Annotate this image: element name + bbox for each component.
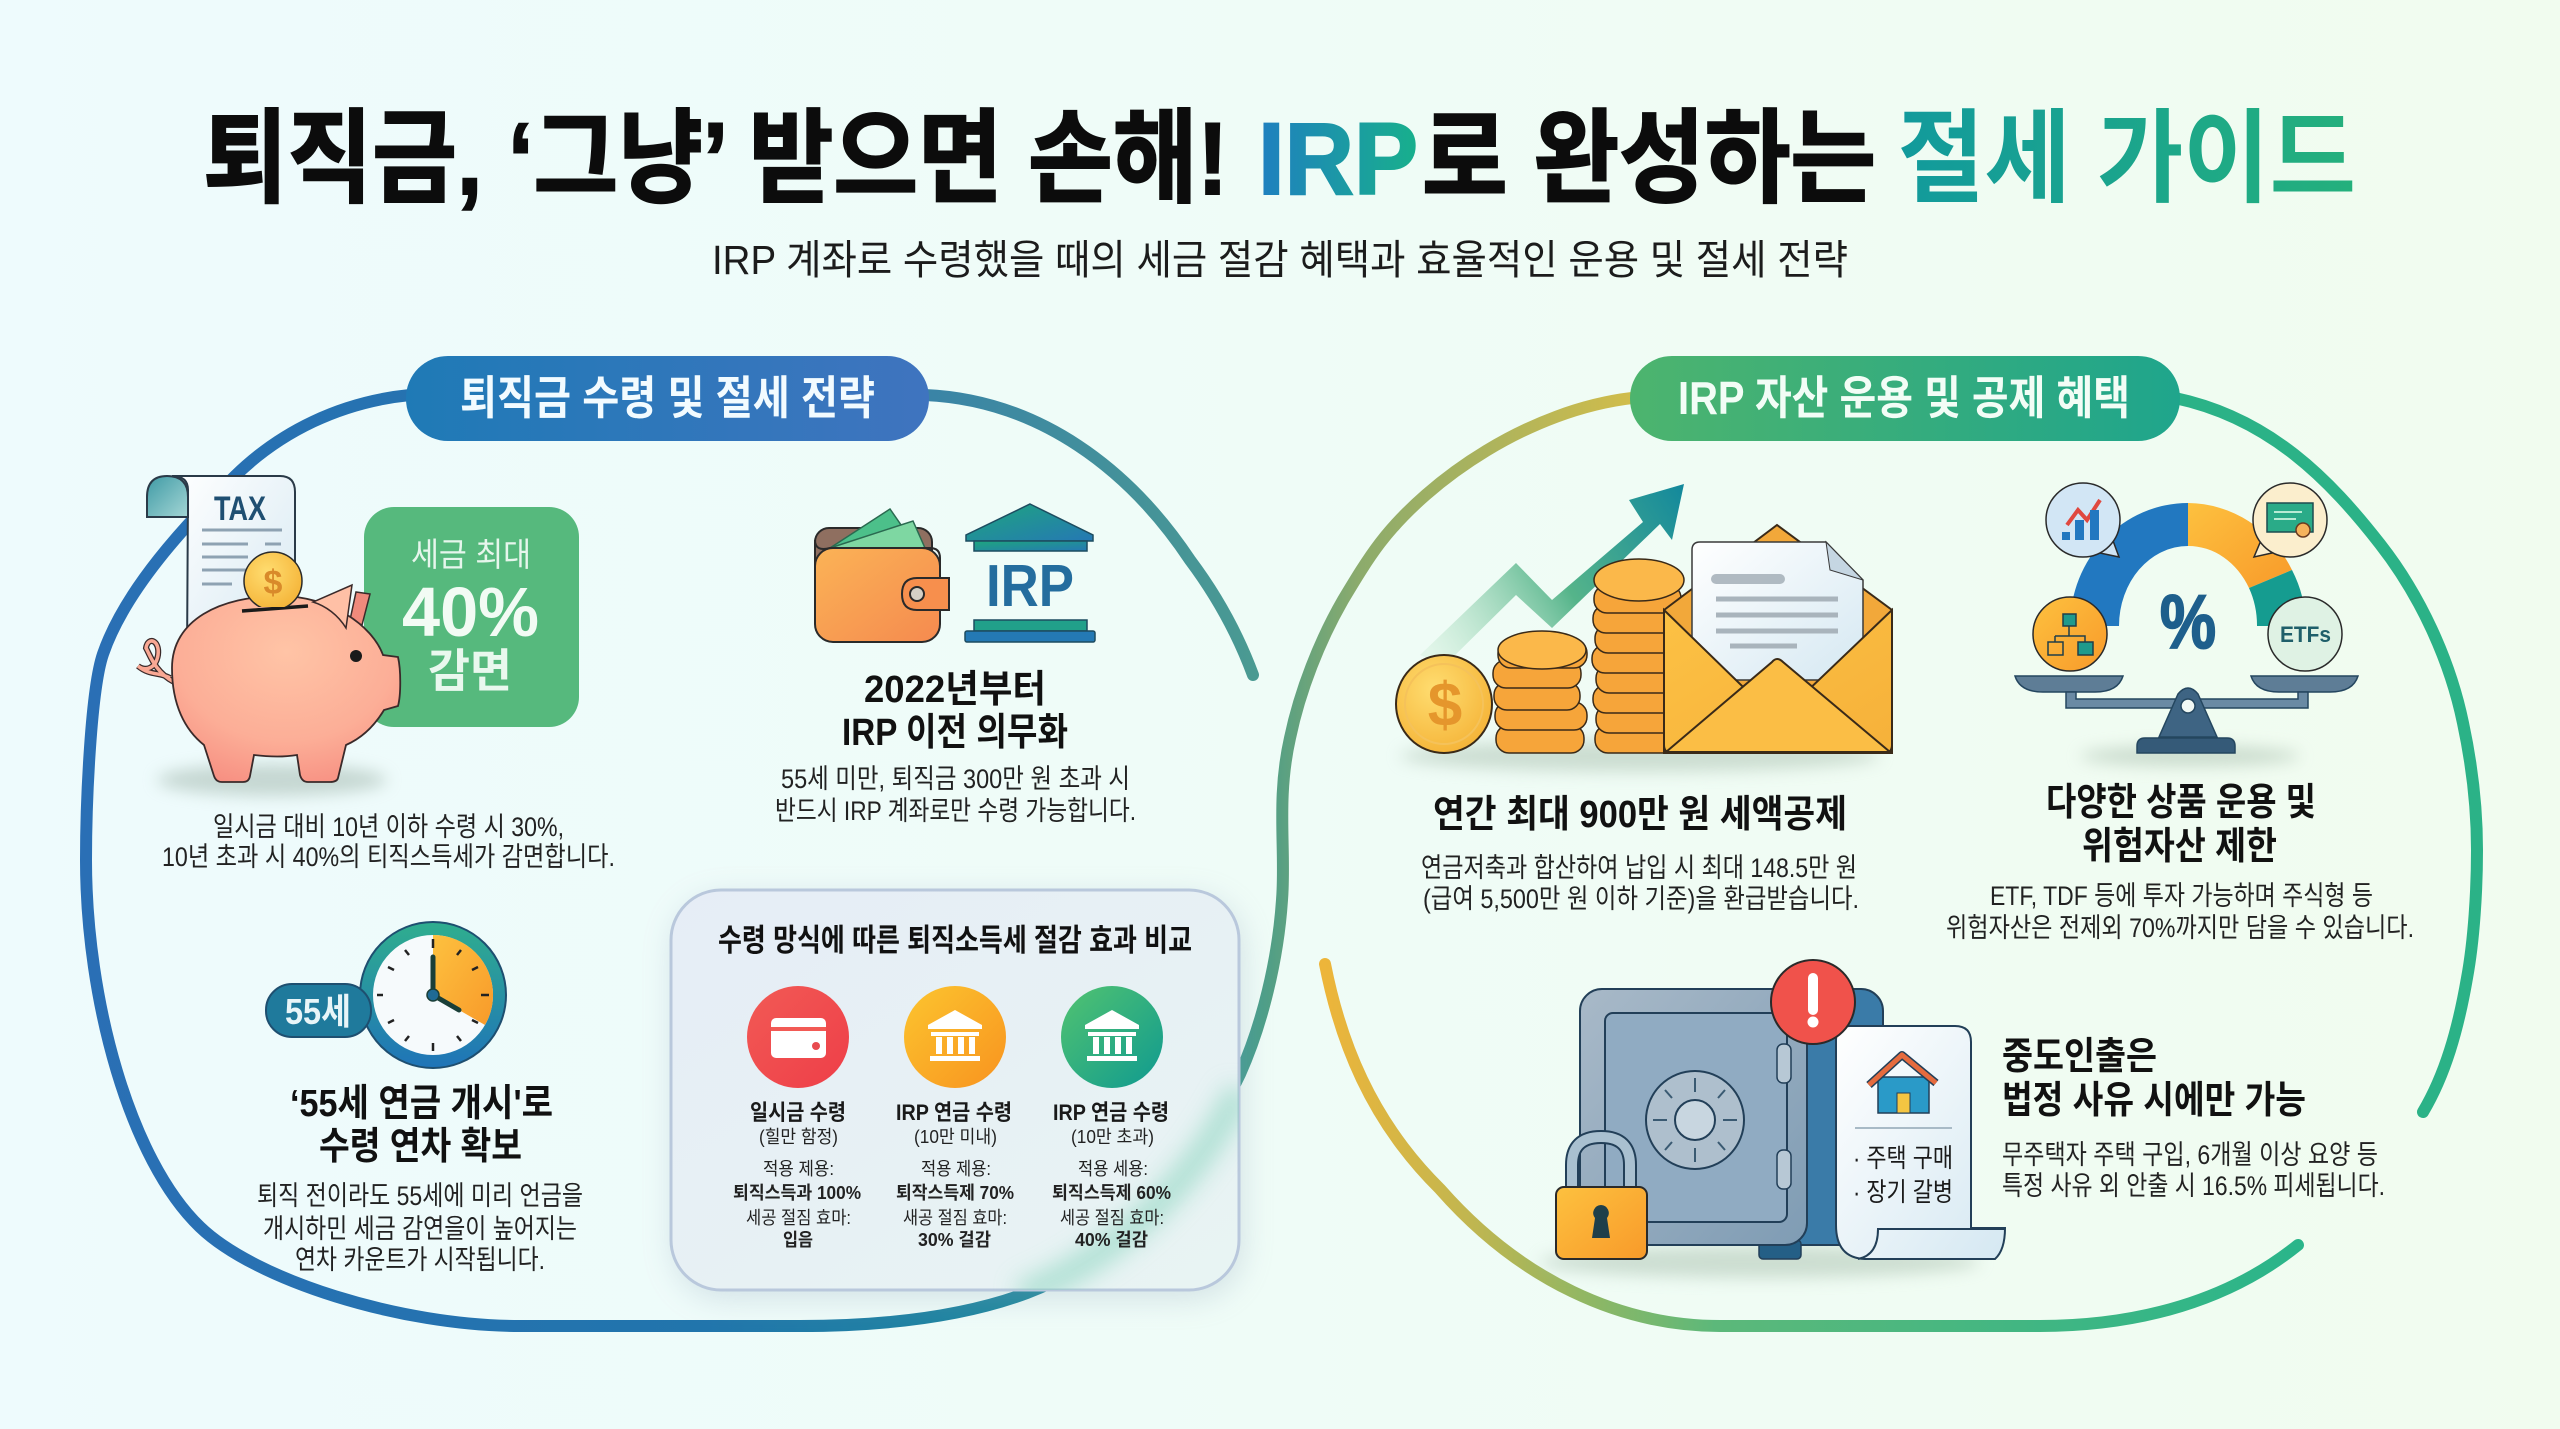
heading: diverse products: 다양한 상품 운용 및	[2046, 782, 2316, 824]
bubble: org chart	[2033, 597, 2107, 671]
column: IRP pension under 10 years: 30% 걸감	[918, 1230, 991, 1250]
heading: start pension: ‘55세 연금 개시'로	[290, 1083, 553, 1125]
text: start pension note: 연차 카운트가 시작됩니다.	[295, 1245, 545, 1275]
text: tax reduction note: 10년 초과 시 40%의 티직스득세가 감면합니다.	[162, 842, 615, 872]
big coin: $	[1428, 671, 1462, 740]
coin stack short	[1493, 631, 1587, 753]
panel: early withdrawal	[1540, 960, 2385, 1278]
badge: tax 40 percent: 감면	[428, 645, 512, 697]
heading: start pension	[290, 1083, 553, 1168]
heading: IRP mandatory: 2022년부터	[864, 669, 1046, 711]
panel: start pension at 55	[257, 922, 583, 1275]
coin stack tall	[1592, 559, 1684, 753]
heading pill: right section: IRP 자산 운용 및 공제 혜택	[1678, 372, 2130, 424]
column: lump sum: (힐만 함정)	[759, 1127, 838, 1147]
icon: gauge and balance scale: %	[2160, 580, 2216, 665]
icon: clock with 55 badge: 55세	[285, 991, 351, 1032]
text: start pension note: 퇴직 전이라도 55세에 미리 언금을	[257, 1181, 583, 1211]
loop line: left section upper right	[925, 395, 1253, 675]
panel: tax reduction with piggy bank	[138, 476, 615, 872]
icon: IRP bank	[965, 504, 1095, 642]
heading: diverse products: 위험자산 제한	[2082, 826, 2277, 868]
envelope	[1664, 525, 1892, 753]
text: start pension note	[257, 1181, 583, 1275]
column: lump sum: 일시금 수령	[750, 1100, 846, 1125]
text: diverse products note	[1946, 881, 2414, 943]
text: tax reduction note	[162, 812, 615, 872]
text: diverse products note: 위험자산은 전제외 70%까지만 담을 수 있습니다.	[1946, 913, 2414, 943]
loop line: left section to right section	[86, 395, 1632, 1326]
column: lump sum: 퇴직스득과 100%	[733, 1183, 861, 1203]
column: IRP pension under 10 years	[896, 986, 1014, 1250]
column: IRP pension over 10 years	[1052, 986, 1171, 1250]
heading: early withdrawal	[2002, 1036, 2306, 1122]
balance scale	[2015, 676, 2358, 753]
panel: IRP transfer mandatory	[775, 504, 1136, 826]
title	[203, 102, 2356, 216]
bubble: ETFs	[2268, 597, 2342, 671]
badge: tax 40 percent	[364, 507, 579, 727]
heading: early withdrawal: 중도인출은	[2002, 1036, 2157, 1078]
loop line: right section lower	[1325, 964, 2298, 1326]
icon: safe with lock and document	[1540, 960, 2005, 1278]
title: 로 완성하는	[1422, 102, 1876, 216]
bubble: certificate	[2253, 483, 2327, 557]
column: IRP pension over 10 years: 적용 세용:	[1078, 1159, 1148, 1179]
document with house	[1836, 1026, 2005, 1259]
big coin	[1396, 655, 1492, 753]
heading: diverse products	[2046, 782, 2316, 868]
text: diverse products note: ETF, TDF 등에 투자 가능하며 주식형 등	[1990, 881, 2373, 911]
text: annual tax credit note	[1421, 853, 1859, 914]
column: IRP pension under 10 years: IRP 연금 수령	[896, 1100, 1012, 1125]
text: annual tax credit note: (급여 5,500만 원 이하 기준)을 환급받습니다.	[1423, 884, 1859, 914]
bubble: chart	[2046, 483, 2120, 557]
icon: tax receipt	[147, 476, 295, 660]
heading: start pension: 수령 연차 확보	[319, 1126, 522, 1168]
column: lump sum	[733, 986, 861, 1250]
icon: wallet with cash	[815, 509, 949, 642]
badge: tax 40 percent: 세금 최대	[411, 536, 531, 573]
icon: gauge and balance scale	[2015, 483, 2358, 766]
heading: annual tax credit: 연간 최대 900만 원 세액공제	[1433, 794, 1847, 836]
icon: piggy bank	[138, 552, 400, 796]
text: IRP mandatory note: 반드시 IRP 계좌로만 수령 가능합니다.	[775, 796, 1136, 826]
text: tax reduction note: 일시금 대비 10년 이하 수령 시 30%,	[213, 812, 564, 842]
text: early withdrawal note	[2002, 1140, 2385, 1201]
text: early withdrawal note: 무주택자 주택 구입, 6개월 이상 요양 등	[2002, 1140, 2378, 1170]
text: IRP mandatory note: 55세 미만, 퇴직금 300만 원 초과 시	[781, 764, 1130, 794]
heading pill: left section	[406, 356, 929, 441]
heading: early withdrawal: 법정 사유 시에만 가능	[2002, 1080, 2306, 1122]
icon: coins, envelope and growth arrow	[1396, 484, 1892, 772]
bubble: ETFs: ETFs	[2280, 622, 2331, 647]
icon: piggy bank: $	[264, 564, 283, 602]
column: IRP pension over 10 years: IRP 연금 수령	[1053, 1100, 1169, 1125]
heading: IRP mandatory	[842, 669, 1068, 754]
title: 퇴직금, ‘그냥’ 받으면 손해!	[203, 102, 1228, 216]
column: IRP pension under 10 years: 적용 제용:	[921, 1159, 991, 1179]
text: annual tax credit note: 연금저축과 합산하여 납입 시 최대 148.5만 원	[1421, 853, 1857, 883]
column: lump sum: 적용 제용:	[763, 1159, 834, 1179]
column: IRP pension over 10 years: 퇴직스득제 60%	[1052, 1183, 1171, 1203]
panel: tax saving comparison card	[671, 890, 1242, 1298]
panel: diverse products and risk limit	[1946, 483, 2414, 943]
text: early withdrawal note: 특정 사유 외 안출 시 16.5% 피세됩니다.	[2002, 1171, 2385, 1201]
column: lump sum: 세공 절짐 효마:	[746, 1208, 851, 1228]
alert badge	[1771, 960, 1855, 1044]
panel: annual tax credit	[1396, 484, 1892, 914]
badge: tax 40 percent: 40%	[402, 573, 539, 651]
column: lump sum: 입음	[783, 1230, 813, 1250]
document with house: · 주택 구매	[1853, 1143, 1953, 1173]
icon: IRP bank: IRP	[986, 553, 1074, 619]
column: IRP pension under 10 years: 새공 절짐 효마:	[903, 1208, 1007, 1228]
column: IRP pension over 10 years: 세공 절짐 효마:	[1060, 1208, 1164, 1228]
column: IRP pension under 10 years: (10만 미내)	[914, 1127, 997, 1147]
icon: tax receipt: TAX	[214, 490, 266, 528]
heading pill: left section: 퇴직금 수령 및 절세 전략	[460, 372, 875, 424]
title: IRP	[1258, 102, 1418, 216]
column: IRP pension over 10 years: (10만 초과)	[1071, 1127, 1154, 1147]
icon: clock with 55 badge	[266, 922, 506, 1068]
heading: IRP mandatory: IRP 이전 의무화	[842, 712, 1068, 754]
loop line: right section upper right	[2175, 398, 2477, 1112]
text: start pension note: 개시하민 세금 감연을이 높어지는	[263, 1214, 577, 1244]
text: IRP mandatory note	[775, 764, 1136, 826]
subtitle: IRP 계좌로 수령했을 때의 세금 절감 혜택과 효율적인 운용 및 절세 전략	[712, 237, 1848, 283]
heading pill: right section	[1630, 356, 2180, 441]
padlock	[1556, 1137, 1647, 1259]
column: IRP pension over 10 years: 40% 걸감	[1075, 1230, 1148, 1250]
title: 절세 가이드	[1898, 102, 2356, 216]
document with house: · 장기 갈병	[1853, 1177, 1953, 1207]
column: IRP pension under 10 years: 퇴작스득제 70%	[896, 1183, 1014, 1203]
heading: comparison card: 수령 망식에 따른 퇴직소득세 절감 효과 비교	[718, 923, 1192, 958]
